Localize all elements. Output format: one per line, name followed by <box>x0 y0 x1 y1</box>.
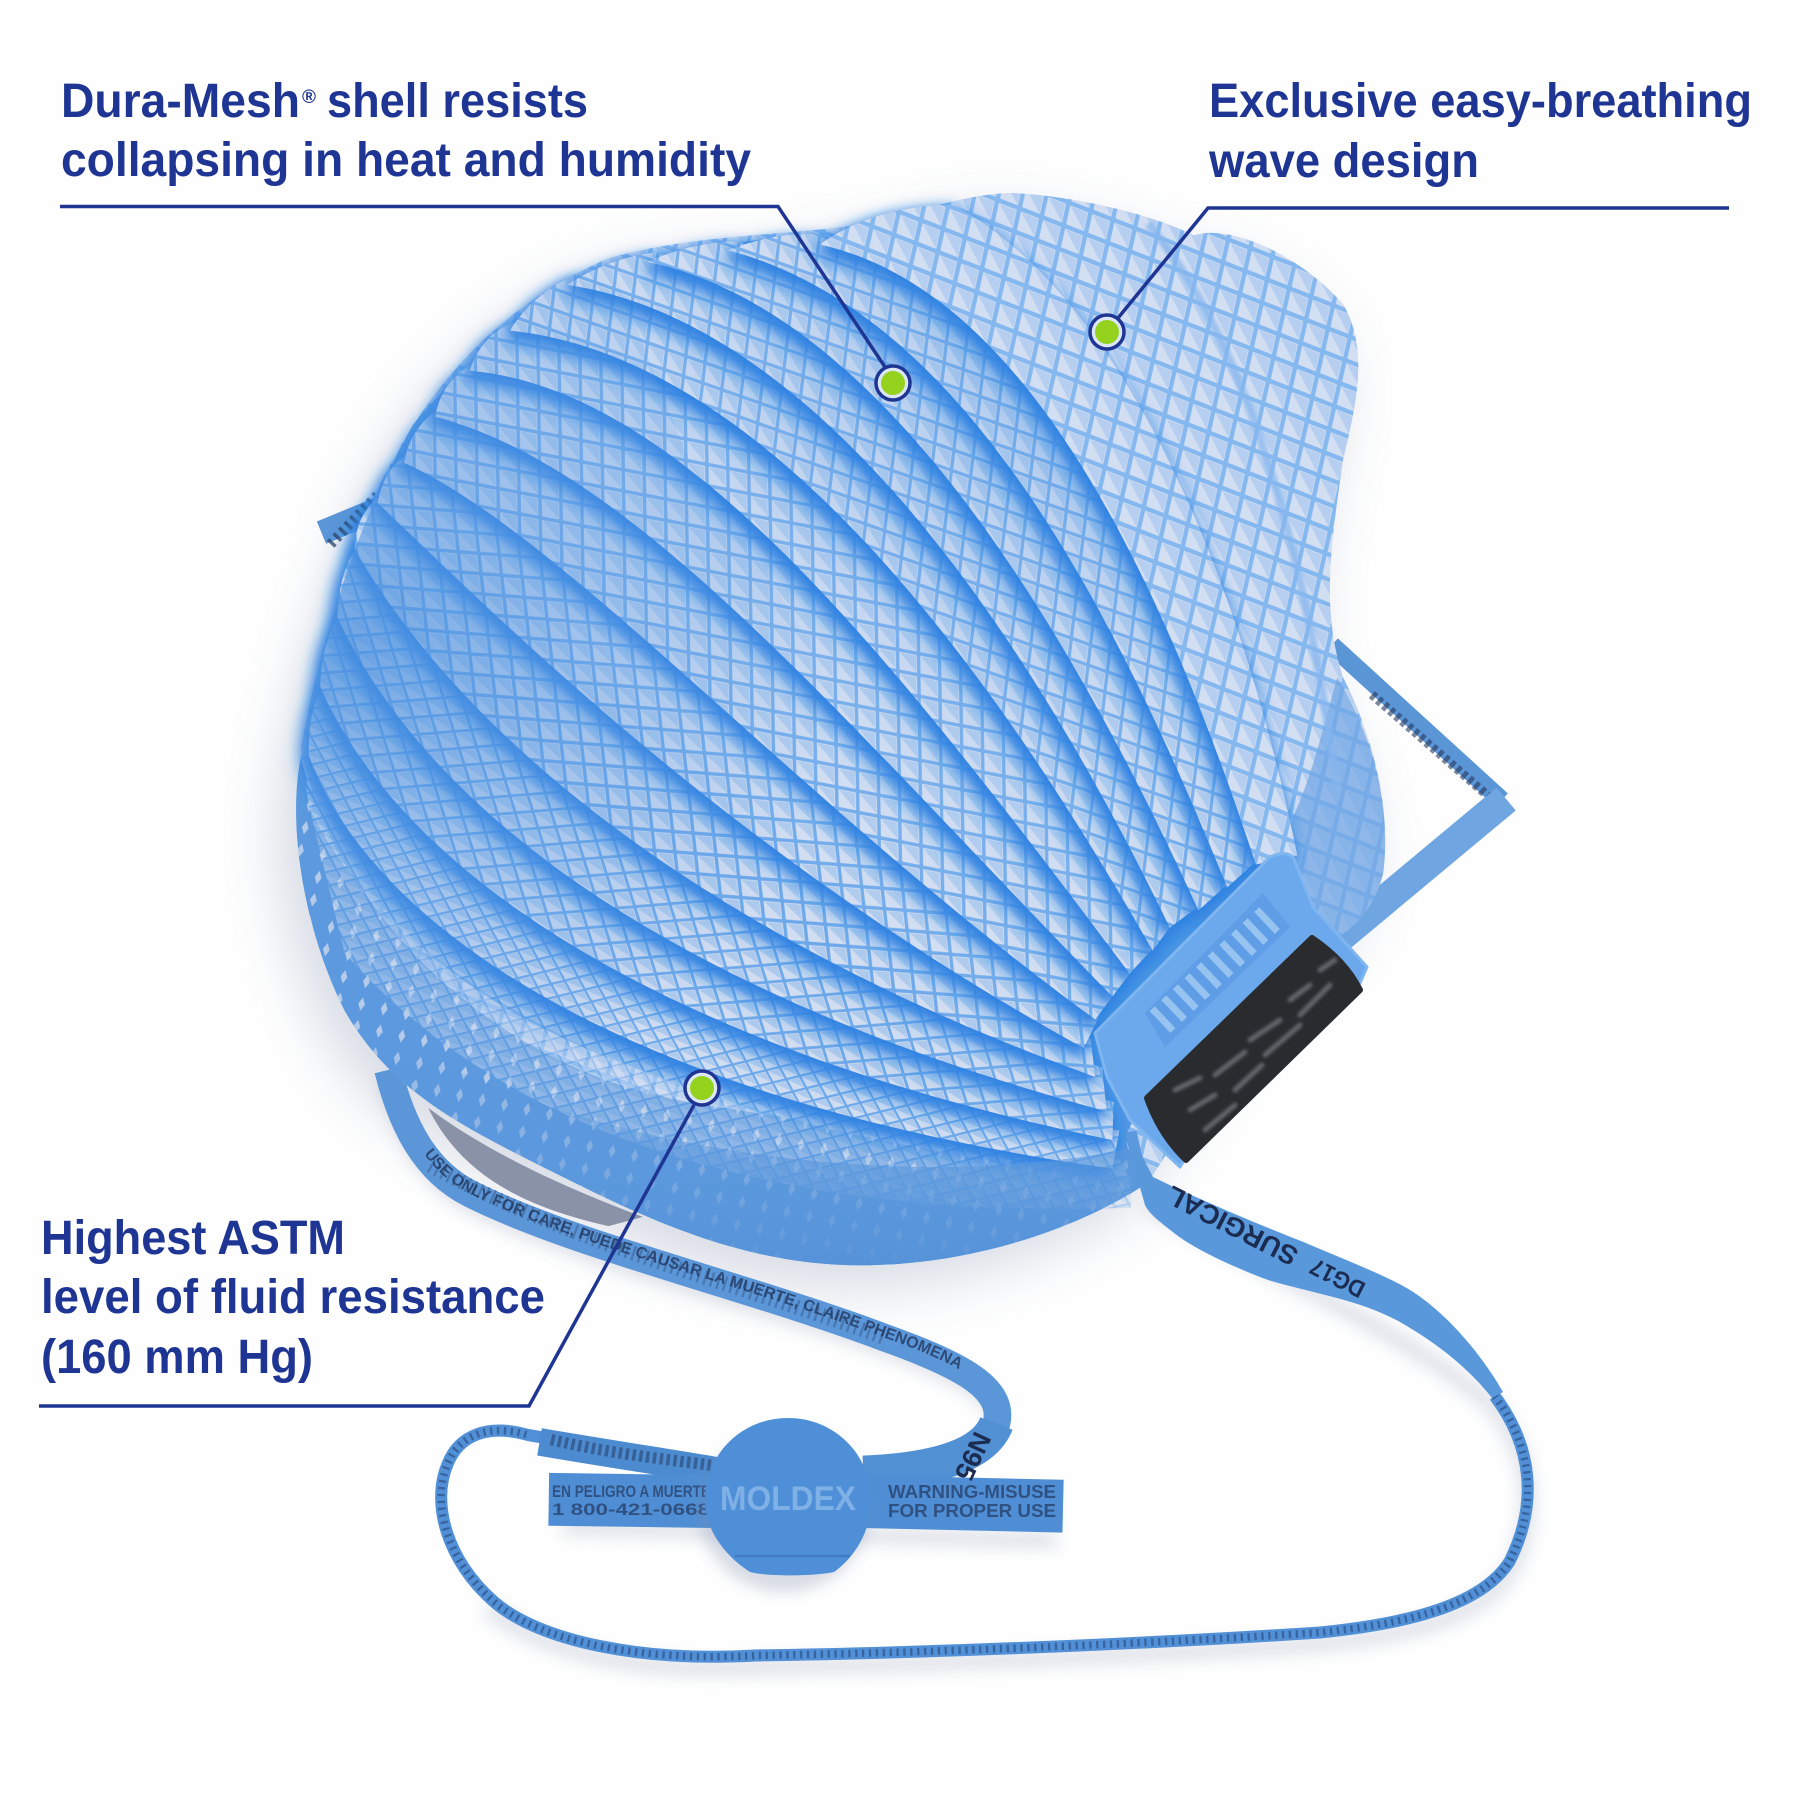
clip body <box>1095 854 1367 1167</box>
strap: free tail <box>549 1499 1063 1506</box>
leader line <box>1118 208 1729 318</box>
button logo: MOLDEX <box>720 1480 856 1518</box>
strap: thin loop <box>441 1396 1528 1657</box>
leader line <box>39 1105 694 1406</box>
leader line <box>60 206 885 367</box>
button body <box>705 1418 871 1575</box>
fading mesh below ribs <box>310 809 1131 1209</box>
strap: thin loop weave <box>441 1396 1528 1657</box>
print: DG17: DG17 <box>1306 1252 1370 1303</box>
strap: left lower band <box>388 1070 997 1492</box>
heading: Dura-Mesh: ® <box>302 87 316 108</box>
heading: level of fluid resistance: level of fluid resistance <box>41 1271 545 1324</box>
shell base <box>296 193 1385 1265</box>
strap: left lower text: USE ONLY FOR CARE, PUEDE CAUSAR LA MUERTE, CLAIRE PHENOMENA <box>426 1148 960 1370</box>
heading: Dura-Mesh: Dura-Mesh <box>61 75 300 128</box>
ribs <box>306 204 1297 1209</box>
callout: fluid resistance <box>39 1071 719 1406</box>
heading: easy-breathing: Exclusive easy-breathing <box>1209 75 1752 128</box>
strap: upper right print <box>1372 695 1490 798</box>
strap print <box>949 1180 1370 1485</box>
print: N95: N95 <box>949 1427 997 1485</box>
left-side blue tint <box>301 258 918 1094</box>
straps <box>296 454 1534 1663</box>
print: SURGICAL: SURGICAL <box>1162 1180 1303 1271</box>
print: right of tail: WARNING-MISUSE <box>888 1482 1056 1502</box>
strap tail print <box>552 1482 1056 1521</box>
adjuster button <box>700 1418 871 1592</box>
mask shell <box>296 193 1385 1265</box>
top lobe wave crease <box>1148 224 1337 792</box>
print: right of tail second row: FOR PROPER USE <box>888 1501 1056 1521</box>
strap: upper right thin run <box>1332 645 1502 800</box>
strap: left lower weave <box>430 1165 884 1337</box>
lower skirt <box>296 758 1148 1265</box>
rib underlay <box>312 235 1263 1148</box>
strap: loop print near button <box>551 1440 726 1467</box>
strap: upper right wide fold <box>1341 799 1506 937</box>
nose clip <box>1095 854 1367 1167</box>
heading: Dura-Mesh: shell resists <box>327 75 588 128</box>
clip inner panel <box>1145 893 1290 1047</box>
heading: Dura-Mesh <box>61 75 751 187</box>
print: left of tail second row: 1 800-421-0668 <box>552 1500 710 1519</box>
marker dot <box>685 1071 719 1105</box>
mask photo <box>287 192 1540 1680</box>
right lobe solid edge <box>1263 677 1385 953</box>
main strap band <box>1125 1133 1503 1398</box>
callout: Dura-Mesh shell <box>60 75 910 400</box>
strap: end widening near button <box>863 1424 996 1473</box>
gap shadow beneath shell <box>428 1108 643 1226</box>
heading: wave design: wave design <box>1208 135 1479 188</box>
marker dot <box>876 366 910 400</box>
callout: wave design <box>1090 75 1752 349</box>
strap: loop widening near button <box>540 1442 735 1474</box>
strap: upper left stub <box>321 505 388 533</box>
button shadow <box>700 1432 868 1592</box>
foam highlight <box>1175 960 1335 1130</box>
heading: 160 mm Hg: (160 mm Hg) <box>41 1331 313 1384</box>
heading: Dura-Mesh: collapsing in heat and humidity <box>61 134 751 187</box>
soft shadow under mask <box>278 216 1367 1288</box>
black foam strip <box>1147 938 1360 1160</box>
button lower ledge <box>735 1555 850 1557</box>
strap: upper left print <box>331 494 379 544</box>
marker dot <box>1090 315 1124 349</box>
clip ridges <box>1160 913 1275 1022</box>
bottom rim darkening <box>344 1010 1148 1265</box>
print: left of tail: EN PELIGRO A MUERTE <box>552 1482 710 1501</box>
heading: Highest ASTM: Highest ASTM <box>41 1212 345 1265</box>
strap shadow <box>385 1079 1528 1668</box>
